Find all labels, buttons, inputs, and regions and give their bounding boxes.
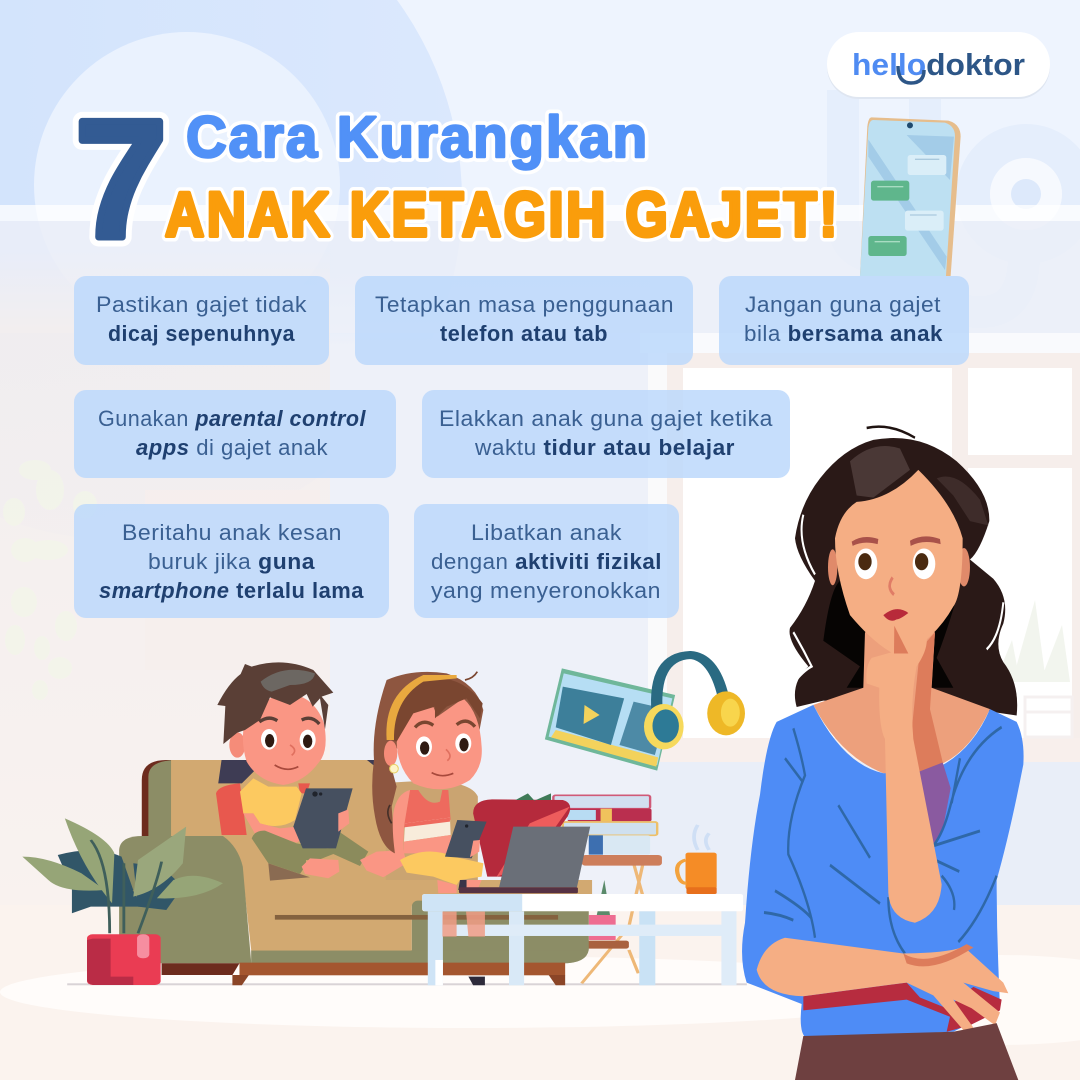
pillow behind boy: [216, 783, 310, 835]
crossed arm and hand: [757, 938, 1008, 1034]
logo: [827, 32, 1050, 99]
heading line 1: Cara Kurangkan: [186, 105, 649, 170]
raised forearm and hand: [866, 621, 942, 923]
hair: [790, 427, 1017, 716]
card 5: [422, 390, 790, 478]
boy tablet: [293, 788, 353, 848]
girl phone: [445, 820, 487, 858]
plant: [22, 818, 223, 985]
books: [553, 795, 657, 855]
illustration: boy and girl: [216, 662, 487, 893]
background: faint plant right: [995, 600, 1070, 682]
card 3: [719, 276, 969, 365]
boy head: [229, 732, 245, 758]
red wrap: [803, 983, 1002, 1032]
heading line 2: ANAK KETAGIH GAJET!: [165, 180, 840, 250]
card 6: Beritahu anak kesan: [122, 520, 342, 545]
heading line 1: Cara Kurangkan: [186, 105, 649, 170]
blouse: [742, 705, 1024, 1038]
icon: phone with chat bubbles: [860, 117, 961, 276]
laptop: [459, 827, 590, 893]
skirt: [795, 1023, 1018, 1080]
illustration: laptop, table, plant and gadgets: [22, 655, 745, 985]
logo: hellodoktor: [852, 47, 1025, 82]
boy body: [240, 778, 302, 826]
card 4: [74, 390, 396, 478]
card 3: bila bersama anak: [744, 321, 943, 346]
card 5: waktu tidur atau belajar: [474, 435, 735, 460]
card 2: [355, 276, 693, 365]
card 6: smartphone terlalu lama: [99, 578, 364, 603]
face: [835, 470, 963, 654]
big number 7: 7: [75, 85, 167, 273]
card 2: telefon atau tab: [440, 321, 608, 346]
background: faint stethoscope logo mark: [843, 90, 1079, 312]
background: faint plant left: [3, 460, 97, 700]
purple top: [915, 763, 951, 846]
girl dress: [404, 790, 451, 825]
neck and chest: [813, 632, 990, 774]
card 6: [74, 504, 389, 618]
coffee table: [422, 894, 743, 985]
panel: tip cards: [74, 276, 969, 618]
card 5: Elakkan anak guna gajet ketika: [439, 406, 773, 431]
facial features: [852, 536, 941, 621]
card 1: [74, 276, 329, 365]
sofa: [119, 760, 592, 985]
ears: [828, 548, 970, 586]
card 7: [414, 504, 679, 618]
card 7: dengan aktiviti fizikal: [431, 549, 662, 574]
card 4: Gunakan parental control: [98, 406, 366, 431]
boy: [216, 662, 407, 881]
card 1: Pastikan gajet tidak: [96, 292, 308, 317]
video player tablet: [545, 668, 675, 771]
red cushion: [473, 793, 570, 877]
card 6: buruk jika guna: [148, 549, 315, 574]
card 1: dicaj sepenuhnya: [108, 321, 295, 346]
card 7: yang menyeronokkan: [431, 578, 661, 603]
floor line: [67, 983, 747, 985]
card 2: Tetapkan masa penggunaan: [375, 292, 674, 317]
girl: [372, 672, 487, 893]
blouse folds: [764, 727, 1002, 954]
title: [75, 85, 840, 273]
heading line 2: ANAK KETAGIH GAJET!: [165, 180, 840, 250]
side table: [582, 855, 662, 983]
illustration: sofa and background furniture: [67, 760, 747, 985]
card 7: Libatkan anak: [471, 520, 623, 545]
card 4: apps di gajet anak: [136, 435, 328, 460]
illustration: thoughtful woman: [742, 427, 1024, 1080]
card 3: Jangan guna gajet: [745, 292, 941, 317]
cup: [677, 825, 717, 894]
headphones: [644, 655, 745, 749]
big number 7: 7: [75, 85, 167, 273]
